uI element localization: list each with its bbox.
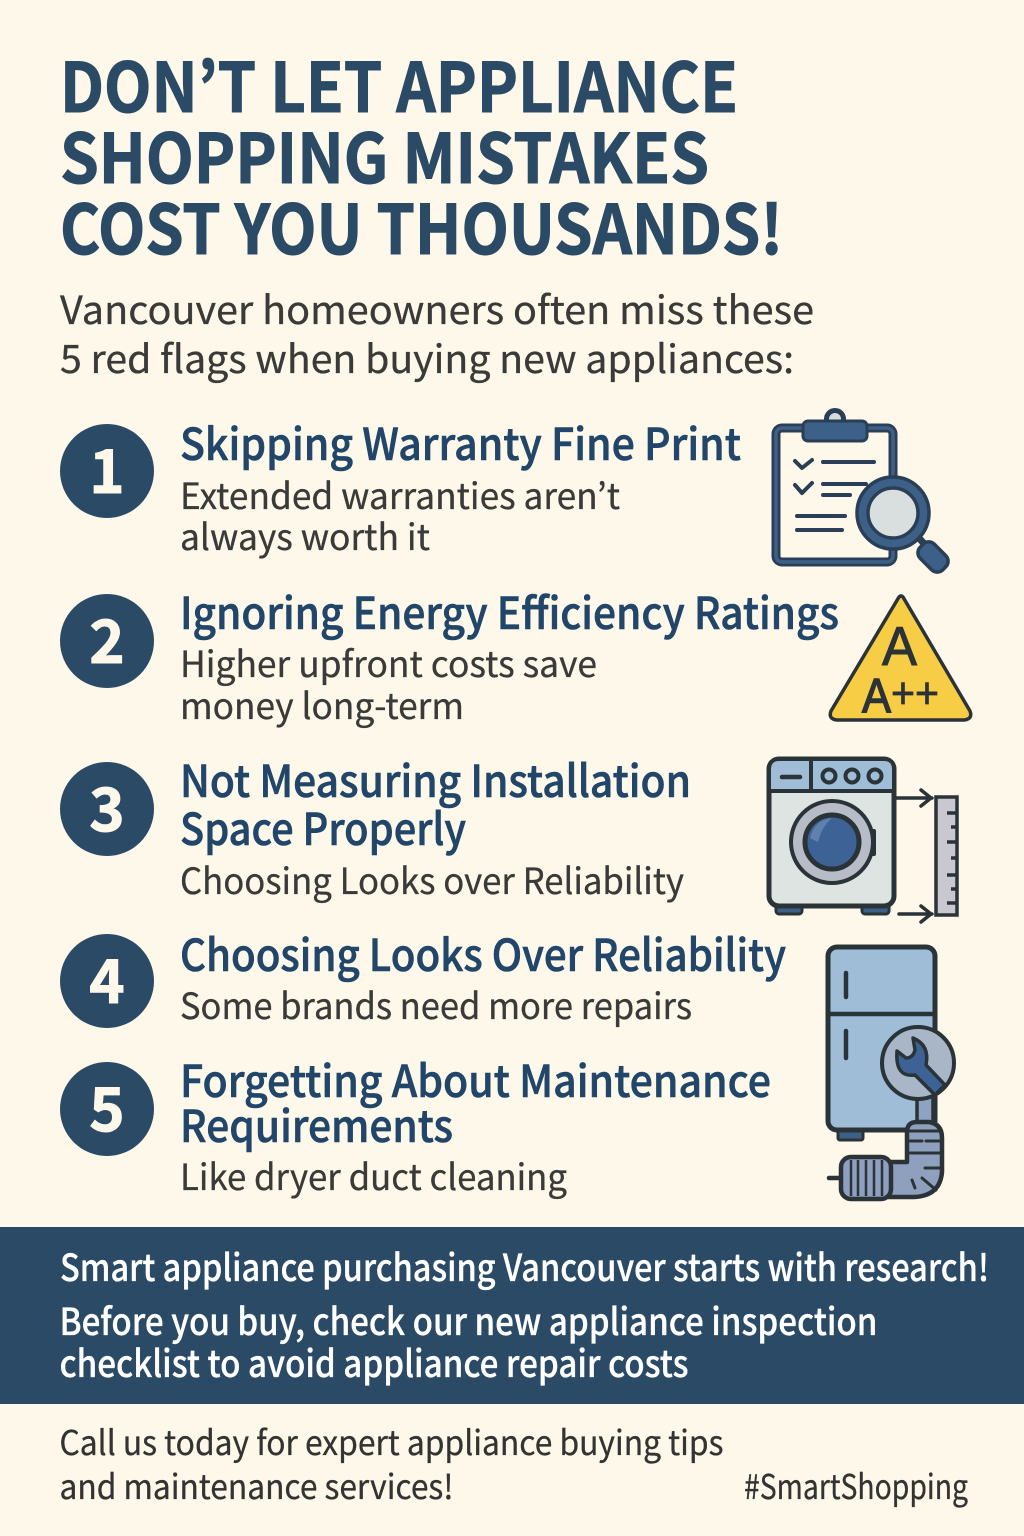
item 1: warranty — [60, 409, 951, 575]
heading 1: Skipping Warranty Fine Print — [180, 409, 741, 473]
number badge 5: 5 — [89, 1062, 125, 1149]
description 3: Choosing Looks over Reliability — [180, 853, 684, 905]
footer call text — [60, 1416, 724, 1509]
heading 4: Choosing Looks Over Reliability — [180, 920, 786, 984]
call-to-action band — [0, 1227, 1024, 1404]
number badge 2: 2 — [89, 594, 125, 681]
description 1: always worth it — [180, 509, 430, 561]
heading 3: Not Measuring Installation — [180, 746, 691, 810]
footer call text: and maintenance services! — [60, 1460, 454, 1509]
description 1 — [180, 468, 620, 561]
number badge 1: 1 — [89, 424, 125, 511]
title: DON’T LET APPLIANCE — [60, 33, 738, 132]
subtitle: 5 red flags when buying new appliances: — [60, 329, 794, 385]
heading 3 — [180, 746, 691, 858]
icon: energy rating triangle: A — [862, 670, 891, 723]
icon: energy rating triangle — [830, 596, 971, 723]
hashtag: #SmartShopping — [744, 1460, 968, 1509]
title: COST YOU THOUSANDS! — [60, 175, 783, 274]
item 5: maintenance — [60, 1046, 771, 1201]
call-to-action band: checklist to avoid appliance repair costs — [60, 1334, 688, 1388]
heading 5: Forgetting About Maintenance — [180, 1046, 771, 1110]
number badge 5 — [60, 1062, 154, 1156]
heading 5 — [180, 1046, 771, 1155]
heading 5: Requirements — [180, 1091, 453, 1155]
call-to-action band: Before you buy, check our new appliance inspection — [60, 1292, 878, 1346]
number badge 3: 3 — [89, 762, 125, 849]
subtitle: Vancouver homeowners often miss these — [60, 280, 814, 336]
heading 2: Ignoring Energy Efficiency Ratings — [180, 578, 839, 642]
description 2: Higher upfront costs save — [180, 636, 597, 688]
number badge 4 — [60, 934, 154, 1028]
icon: energy rating triangle: ++ — [891, 669, 939, 718]
title: SHOPPING MISTAKES — [60, 104, 709, 203]
number badge 3 — [60, 762, 154, 856]
item 2: energy ratings — [60, 578, 971, 730]
description 2: money long-term — [180, 678, 464, 730]
number badge 4: 4 — [89, 934, 125, 1021]
icon: fridge with wrench and duct — [828, 947, 954, 1199]
number badge 1 — [60, 424, 154, 518]
icon: clipboard with magnifying glass — [776, 410, 951, 575]
heading 3: Space Properly — [180, 794, 466, 858]
description 2 — [180, 636, 597, 730]
description 1: Extended warranties aren’t — [180, 468, 620, 520]
description 4: Some brands need more repairs — [180, 978, 692, 1030]
icon: washer with ruler — [769, 759, 957, 922]
item 3: measuring — [60, 746, 957, 922]
number badge 2 — [60, 594, 154, 688]
subtitle — [60, 280, 814, 385]
description 5: Like dryer duct cleaning — [180, 1149, 567, 1201]
footer call text: Call us today for expert appliance buying tips — [60, 1416, 724, 1465]
title — [60, 33, 783, 274]
item 4: reliability — [60, 920, 786, 1030]
icon: energy rating triangle: A — [882, 615, 917, 677]
